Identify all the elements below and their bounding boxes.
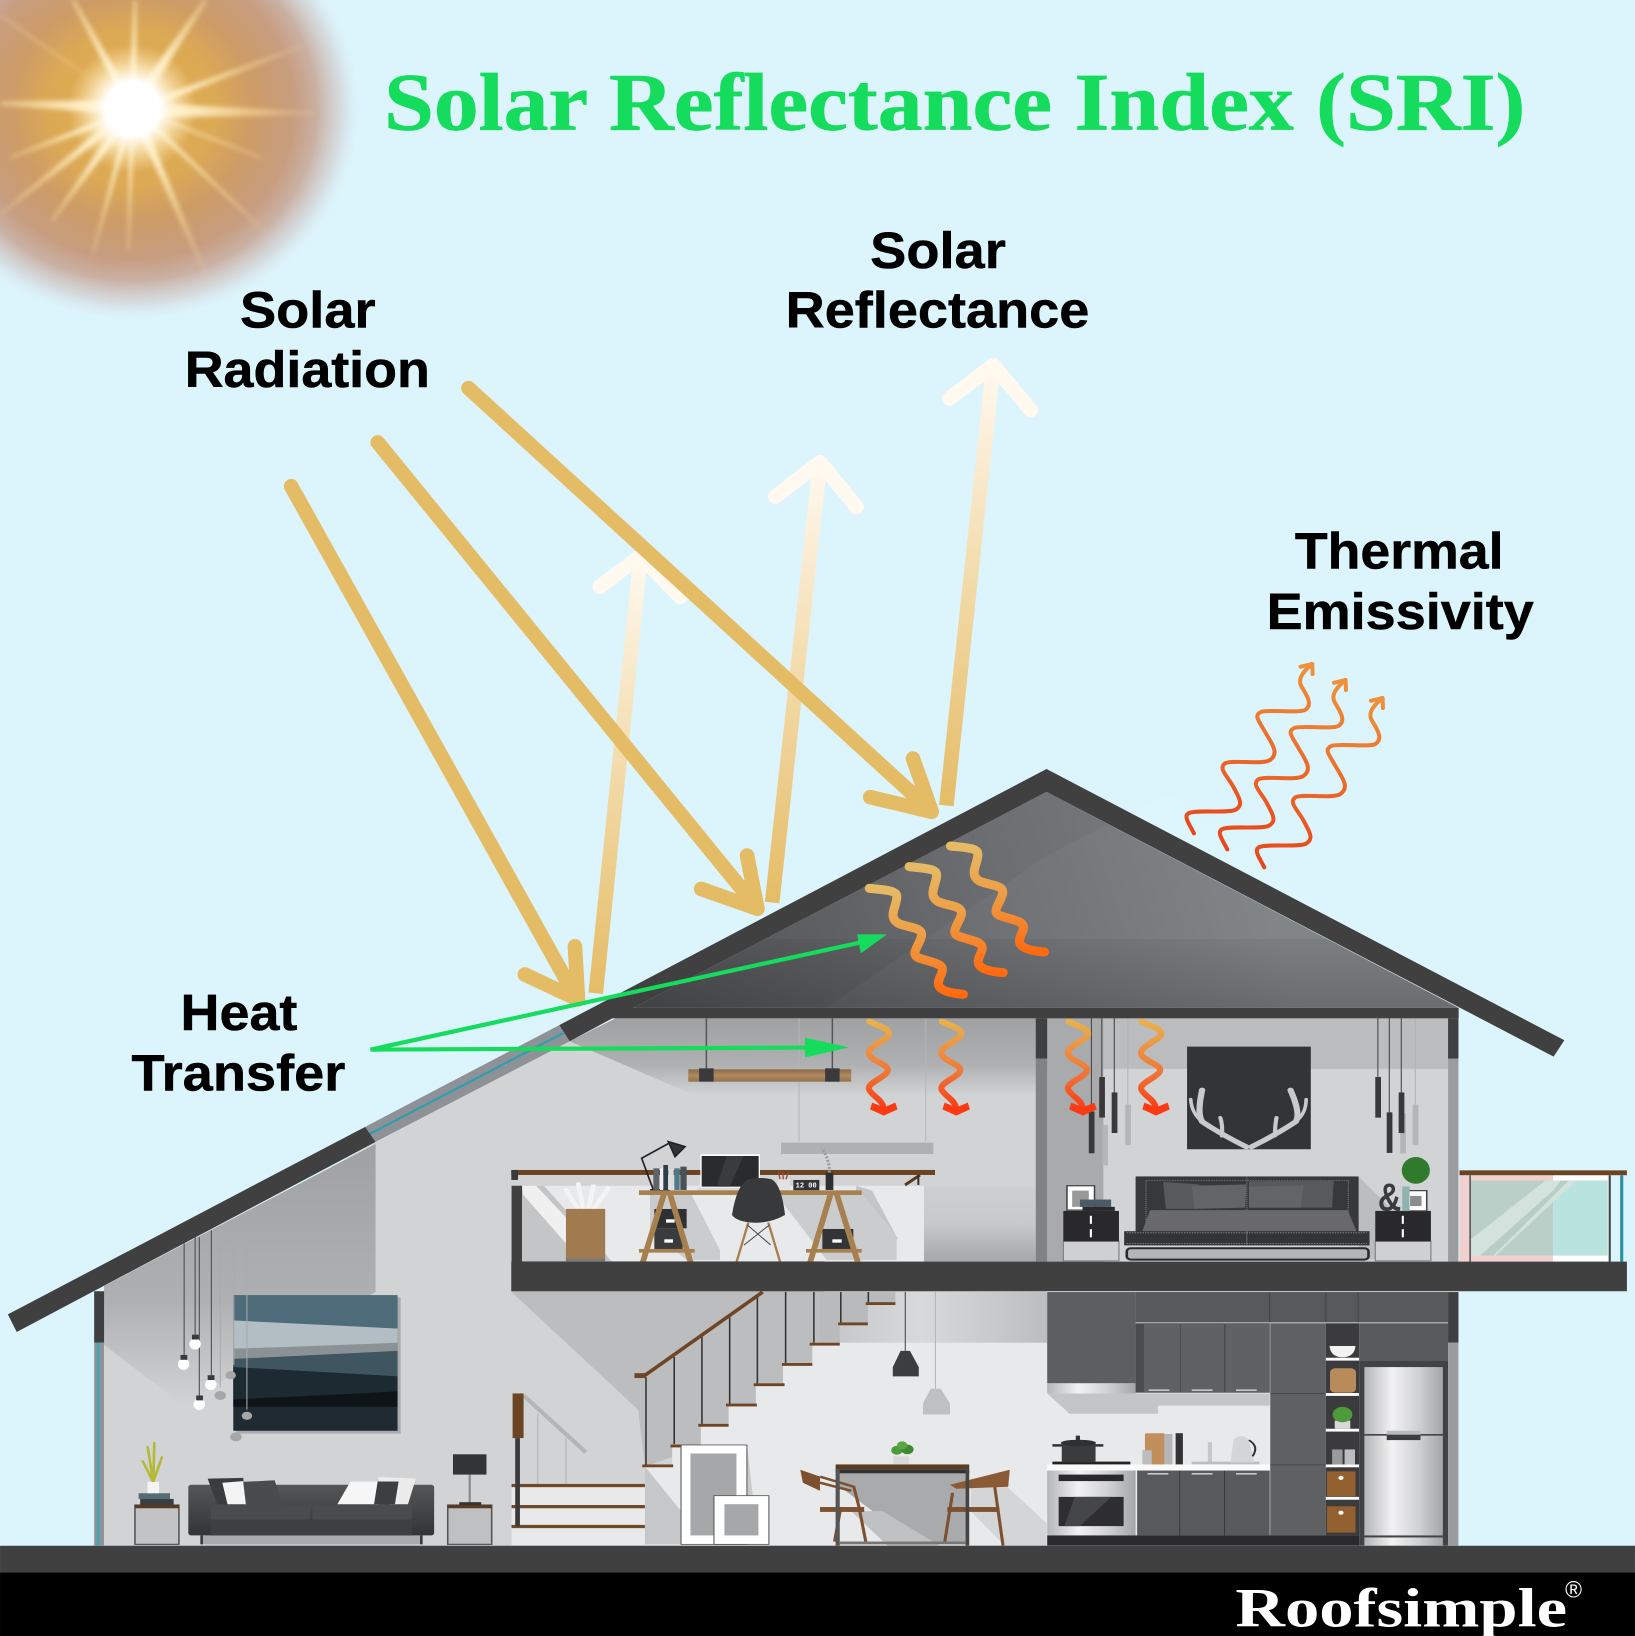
attic	[633, 792, 1459, 1008]
pendant lights	[178, 1213, 252, 1441]
open shelves	[1326, 1323, 1359, 1535]
label: thermal emissivity: Thermal	[1295, 523, 1504, 580]
side table with plant	[135, 1442, 179, 1544]
books	[653, 1165, 687, 1190]
logo: ®	[1565, 1576, 1582, 1602]
ground floor slab and base band	[0, 1546, 1635, 1572]
label: thermal emissivity	[1267, 523, 1534, 640]
chair	[732, 1178, 785, 1262]
attic heat waves	[869, 846, 1045, 994]
room shade	[104, 1144, 376, 1406]
kitchen counter items	[1052, 1433, 1259, 1464]
thermal emissivity waves	[1186, 664, 1383, 867]
label: solar reflectance: Reflectance	[786, 282, 1089, 339]
right wall post	[1448, 1018, 1458, 1546]
paper tube basket	[565, 1183, 609, 1261]
label: solar radiation: Solar	[240, 282, 376, 339]
pendant lamps	[893, 1292, 950, 1415]
counter and oven	[1047, 1464, 1359, 1546]
label: solar radiation	[185, 282, 430, 398]
ground floor living room	[94, 1144, 820, 1546]
hanging bar	[781, 1143, 933, 1154]
pencil cup	[778, 1171, 790, 1190]
clock	[793, 1180, 819, 1191]
desk and trestles	[639, 1190, 862, 1262]
upper stair treads	[820, 1292, 895, 1346]
stair wall white area	[645, 1345, 820, 1546]
vase with branch	[822, 1148, 833, 1190]
office desk on loft	[511, 1142, 935, 1262]
nightstand left	[1063, 1186, 1119, 1261]
roof	[8, 769, 1564, 1332]
left wall post	[94, 1291, 104, 1546]
floor slab right	[820, 1262, 1627, 1291]
clock: 12 00	[796, 1183, 817, 1191]
sofa	[188, 1477, 434, 1544]
bedroom wall and kitchen wall	[1047, 1018, 1448, 1546]
heat arrow 4	[1141, 1022, 1170, 1116]
heat arrow 3	[1068, 1022, 1097, 1116]
label: heat transfer: Heat	[181, 984, 297, 1041]
incoming arrow 1	[291, 486, 578, 1000]
title: Solar Reflectance Index (SRI)	[384, 56, 1525, 147]
desk lamp	[642, 1142, 685, 1190]
reflected arrow 1	[596, 556, 680, 993]
ground floor right half	[820, 1018, 1627, 1546]
balcony railing	[1459, 1170, 1627, 1262]
loft parapet back	[512, 1186, 820, 1262]
room divider	[1036, 1018, 1047, 1262]
label: solar reflectance: Solar	[870, 222, 1006, 279]
refrigerator	[1359, 1323, 1448, 1546]
dining table and chairs	[820, 1464, 1047, 1546]
kitchen upper cabinets	[1047, 1292, 1448, 1414]
icon: sun with rays	[0, 0, 364, 319]
dining chair left back	[800, 1470, 820, 1491]
antler painting	[1187, 1047, 1311, 1149]
bed	[1124, 1176, 1397, 1260]
bedroom pendants	[1089, 1018, 1418, 1165]
staircase	[634, 1292, 820, 1467]
label: thermal emissivity: Emissivity	[1267, 583, 1534, 640]
label: solar radiation: Radiation	[185, 341, 430, 398]
floor lamp table	[448, 1454, 492, 1544]
office upper wall shade	[570, 1018, 1036, 1096]
nightstand right with decor: &	[1378, 1176, 1401, 1219]
label: heat transfer: Transfer	[131, 1044, 345, 1101]
reflected arrow 3	[946, 365, 1031, 805]
nightstand right with decor	[1375, 1157, 1431, 1261]
heat arrow 1	[869, 1022, 889, 1110]
handrail	[511, 1170, 935, 1185]
under-loft shade	[512, 1292, 820, 1466]
lower steps with newel post	[512, 1393, 645, 1546]
downward heat arrows	[869, 1022, 1170, 1116]
table plant	[891, 1441, 914, 1464]
reflected solar arrows	[596, 365, 1031, 993]
loft floor slab	[512, 1262, 820, 1291]
pendant wood light	[688, 1018, 926, 1142]
under-loft gradient band	[820, 1292, 1047, 1343]
laptop monitor	[697, 1154, 761, 1190]
loft parapet right part	[820, 1186, 924, 1262]
heat arrow 2	[941, 1022, 970, 1116]
interior wall base	[104, 1018, 1047, 1546]
label: heat transfer	[131, 984, 345, 1101]
incoming arrow 3	[468, 388, 932, 812]
desk shadows	[650, 1195, 897, 1260]
heat transfer green arrows	[370, 934, 887, 1057]
house cross-section	[0, 769, 1635, 1636]
incoming arrow 2	[378, 442, 758, 909]
painting: abstract landscape	[233, 1295, 401, 1434]
reflected arrow 2	[772, 462, 857, 903]
filing cabinets	[654, 1209, 853, 1249]
label: solar reflectance	[786, 222, 1089, 339]
office right wall	[820, 1186, 1036, 1262]
picture frames	[645, 1445, 769, 1544]
tall cabinet	[1270, 1323, 1326, 1535]
incoming solar radiation arrows	[291, 388, 932, 1000]
